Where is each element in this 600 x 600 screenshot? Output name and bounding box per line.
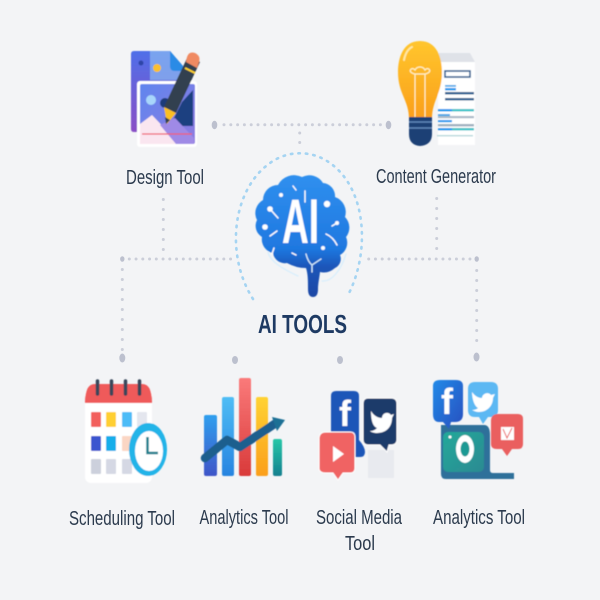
label: analytics tool: Analytics Tool bbox=[200, 507, 288, 529]
icon: design tool bbox=[131, 51, 200, 147]
icon: social laptop bbox=[433, 380, 523, 479]
label: scheduling tool: Scheduling Tool bbox=[69, 508, 175, 530]
clock bbox=[129, 423, 167, 476]
icon: social media cluster bbox=[319, 391, 397, 480]
dotted ring around brain bbox=[236, 153, 362, 299]
icon: social media cluster: f bbox=[339, 393, 352, 434]
label: social media tool: Social Media bbox=[316, 507, 403, 529]
icon: social laptop: f bbox=[441, 381, 454, 422]
icon: scheduling calendar bbox=[85, 381, 167, 483]
label: content generator: Content Generator bbox=[376, 166, 496, 188]
AI letters: AI bbox=[282, 187, 319, 257]
label: design tool: Design Tool bbox=[126, 167, 204, 189]
connector end dots bbox=[119, 121, 480, 364]
icon: content generator bbox=[398, 41, 475, 146]
label: social media tool bbox=[316, 507, 403, 555]
dotted connectors bbox=[122, 125, 477, 350]
label: analytics tool 2: Analytics Tool bbox=[433, 507, 525, 529]
title: AI TOOLS bbox=[258, 309, 347, 339]
icon: analytics bars bbox=[204, 378, 285, 476]
label: social media tool: Tool bbox=[345, 533, 375, 555]
icon: AI brain bbox=[255, 175, 349, 297]
